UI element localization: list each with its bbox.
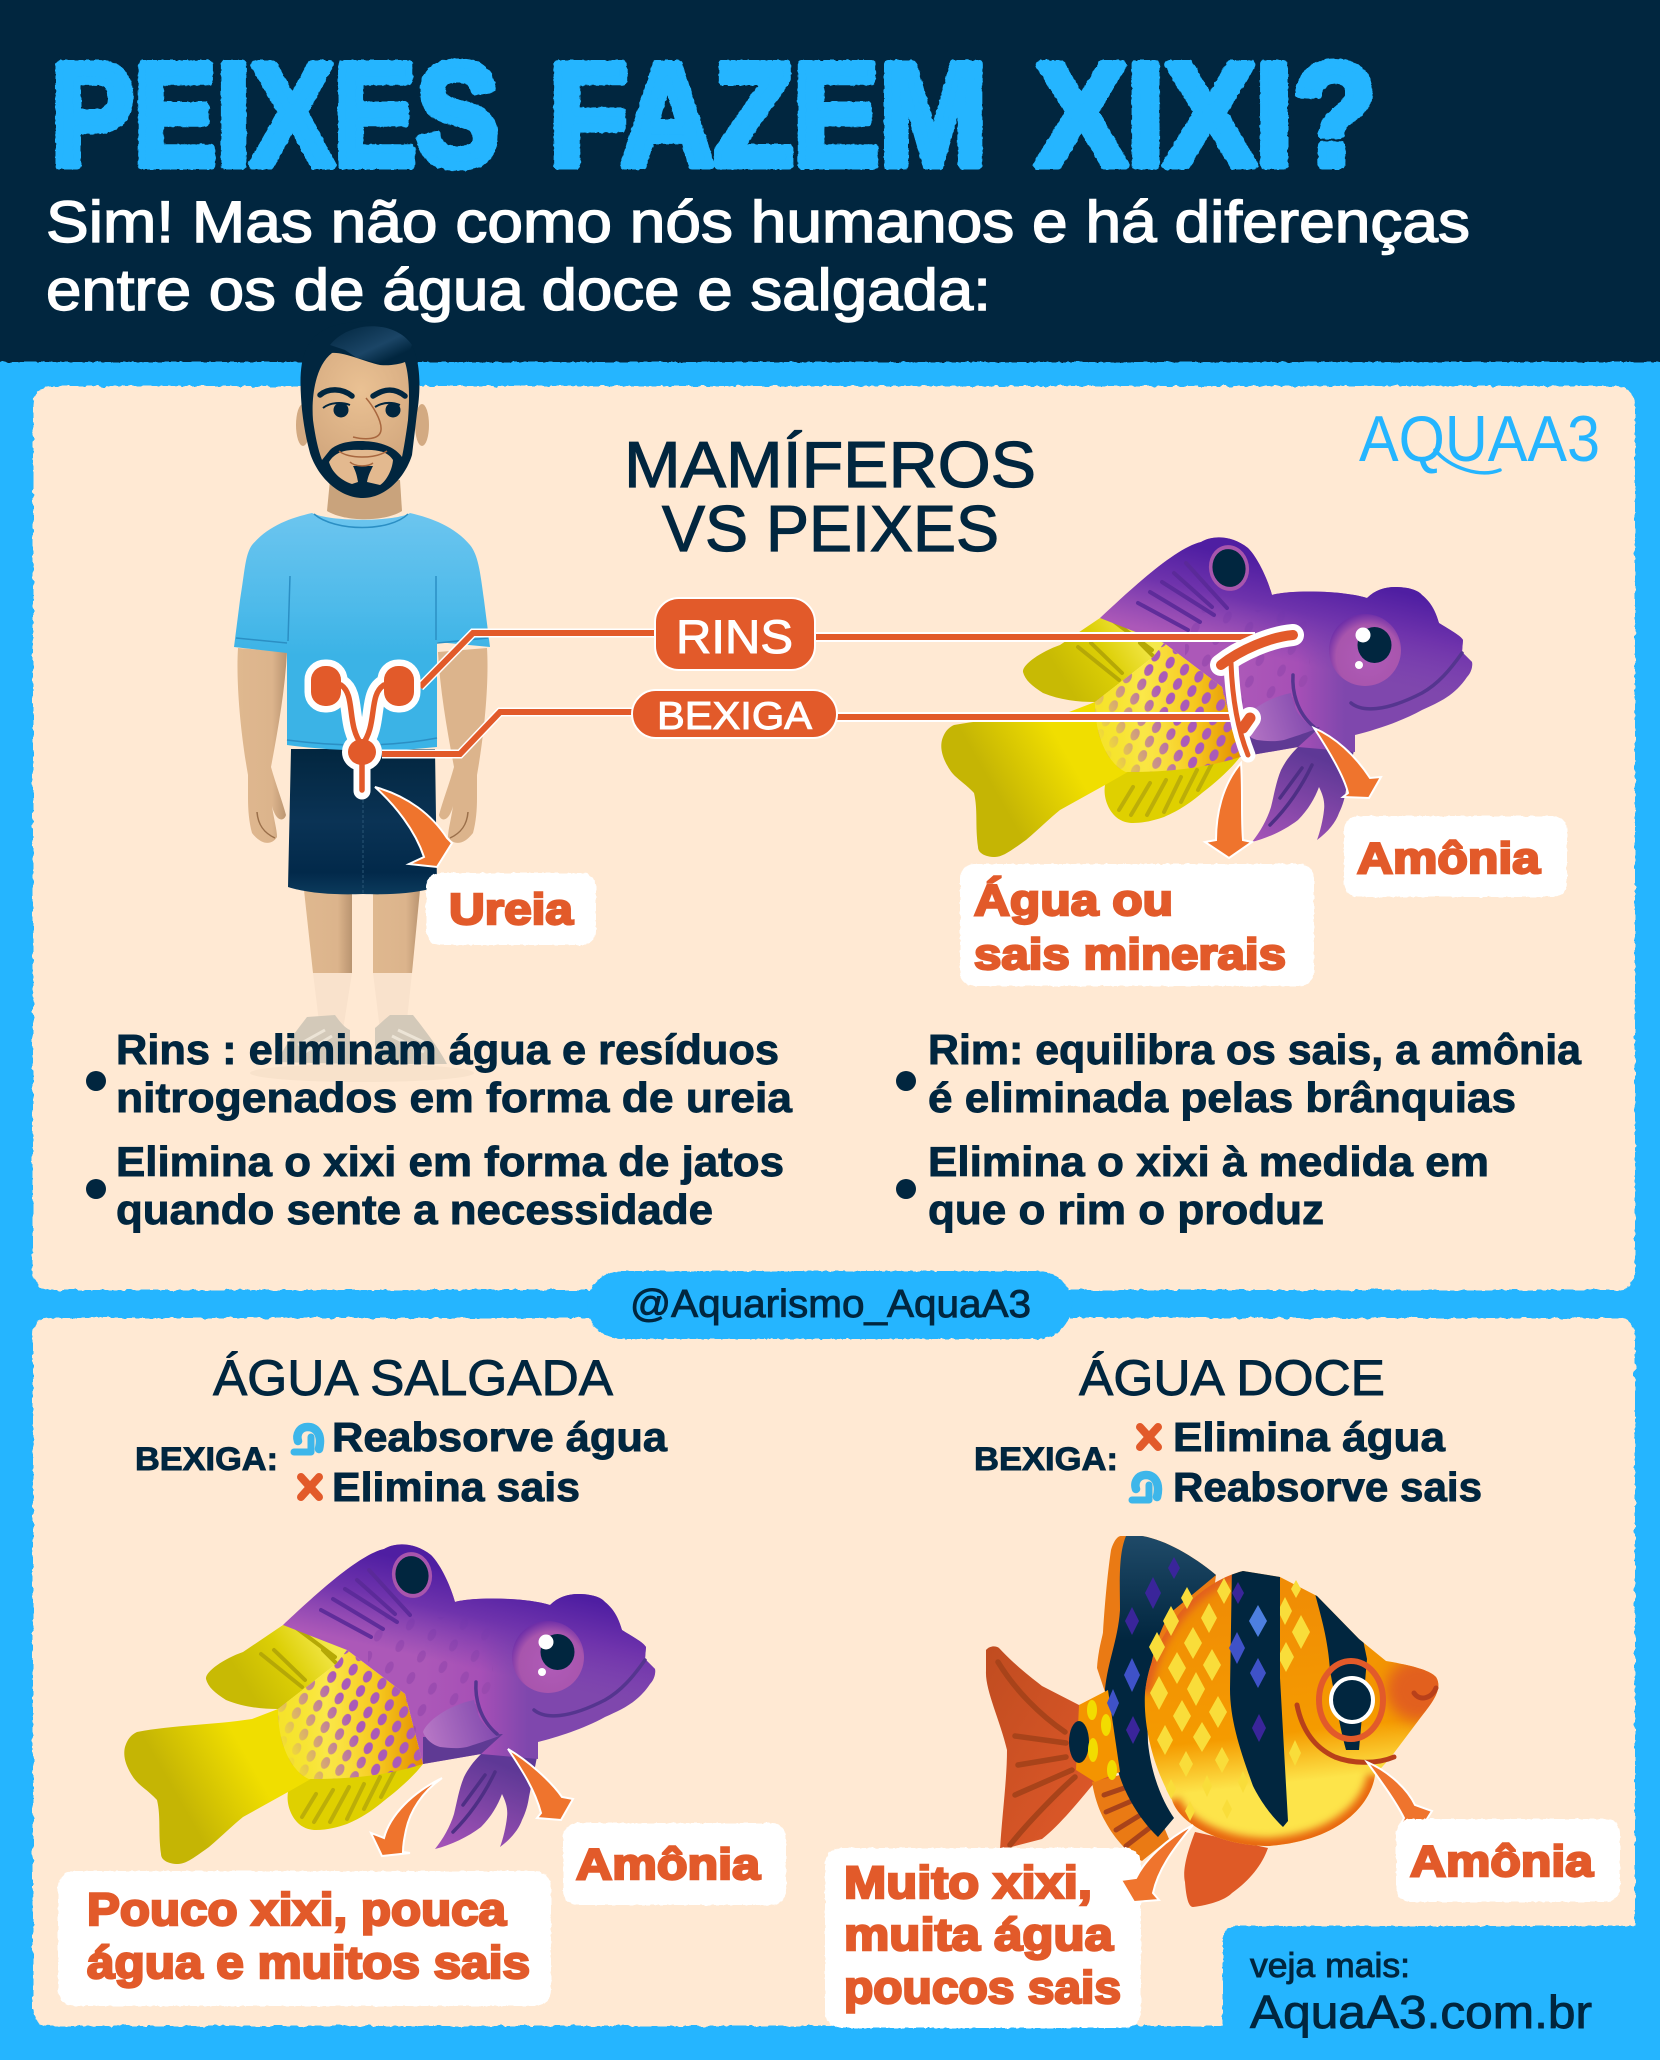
label: much urine: poucos sais — [844, 1962, 1121, 2013]
icon: eliminate — [1140, 1427, 1158, 1447]
label: ammonia: Amônia — [1357, 834, 1541, 883]
panel: mammals vs fish — [33, 386, 1635, 1290]
subtitle: Sim! Mas não como nós humanos e há diferenças — [46, 190, 1470, 255]
mouth — [339, 451, 387, 466]
illustration: man — [234, 322, 490, 1082]
label: ammonia fresh water — [1396, 1819, 1620, 1902]
arrow: fish water or salts — [1205, 763, 1252, 858]
organs: fish kidney and bladder — [1221, 635, 1293, 755]
text block: mammals: Elimina o xixi em forma de jatos — [116, 1138, 784, 1185]
bladder list: salt water: Elimina sais — [332, 1464, 580, 1510]
label: water or mineral salts: sais minerais — [974, 930, 1286, 979]
nose — [353, 398, 381, 439]
arrow: little urine — [371, 1778, 442, 1856]
social handle pill — [587, 1271, 1072, 1339]
subtitle — [46, 190, 1470, 323]
label: bladder: BEXIGA — [657, 695, 812, 738]
logo: AQUAA3 — [1359, 402, 1600, 475]
label: kidneys — [655, 598, 815, 670]
anal fin — [1092, 1770, 1169, 1861]
shorts — [288, 749, 437, 894]
stripes — [1230, 1565, 1367, 1827]
heading: mammals vs fish: MAMÍFEROS — [624, 428, 1036, 501]
bullet — [86, 1179, 106, 1199]
arrow: fish ammonia — [1314, 728, 1381, 798]
peduncle — [1076, 1690, 1120, 1782]
text block: mammals: nitrogenados em forma de ureia — [116, 1074, 793, 1121]
arrow: ammonia salt water — [508, 1749, 573, 1820]
fin and stripe spots — [1107, 1605, 1267, 1717]
head and beard — [301, 322, 419, 498]
connector: kidneys line to fish — [420, 633, 1255, 687]
label: ammonia salt water: Amônia — [576, 1840, 761, 1889]
organs: human kidneys and bladder — [311, 666, 414, 791]
legs — [304, 890, 420, 1030]
ears — [296, 404, 429, 446]
label: ammonia salt water — [563, 1823, 786, 1905]
text block: mammals: quando sente a necessidade — [116, 1186, 713, 1233]
arrow: urea — [375, 787, 452, 867]
face — [313, 353, 409, 460]
pelvic fin — [1184, 1832, 1268, 1907]
nostril — [1414, 1688, 1436, 1698]
shoes — [277, 1015, 447, 1064]
title: XIXI? — [1036, 33, 1376, 196]
body edge shading — [1145, 1571, 1454, 1846]
heading: fresh water: ÁGUA DOCE — [1079, 1350, 1385, 1406]
neck — [327, 480, 402, 519]
bladder list: salt water: BEXIGA: — [135, 1441, 278, 1477]
label: ammonia fresh water: Amônia — [1410, 1837, 1594, 1886]
text block: mammals: Rins : eliminam água e resíduos — [116, 1026, 779, 1073]
website box: veja mais: — [1250, 1947, 1410, 1985]
title: FAZEM — [549, 33, 987, 196]
title: PEIXES — [51, 33, 499, 196]
heading: mammals vs fish — [624, 428, 1036, 565]
connector: bladder line to fish — [382, 712, 1232, 754]
eye — [1319, 1661, 1383, 1739]
bullet — [896, 1071, 916, 1091]
website box — [1223, 1926, 1660, 2060]
label: water or mineral salts — [960, 864, 1314, 986]
header band — [0, 0, 1660, 362]
label: much urine: Muito xixi, — [844, 1857, 1092, 1908]
label: water or mineral salts: Água ou — [974, 875, 1173, 925]
eyes — [334, 402, 400, 418]
hair highlight — [330, 326, 412, 365]
icon: reabsorb — [294, 1427, 320, 1452]
bladder list: salt water — [135, 1414, 668, 1510]
label: kidneys: RINS — [676, 610, 793, 663]
arrow: ammonia fresh water — [1367, 1762, 1432, 1830]
text block: fish: Elimina o xixi à medida em — [928, 1138, 1489, 1185]
fish: orange striped — [986, 1536, 1454, 1907]
label: ammonia — [1344, 816, 1567, 897]
text block: fish — [896, 1026, 1582, 1233]
label: little urine: Pouco xixi, pouca — [87, 1884, 507, 1935]
tail — [986, 1646, 1110, 1850]
shirt — [234, 513, 490, 751]
fish: purple and yellow (top) — [941, 537, 1472, 857]
arms — [237, 648, 488, 843]
bladder list: fresh water: Elimina água — [1173, 1414, 1446, 1460]
text block: fish: é eliminada pelas brânquias — [928, 1074, 1516, 1121]
label: bladder — [632, 690, 837, 738]
body — [1145, 1571, 1438, 1846]
bullet — [896, 1179, 916, 1199]
title — [51, 33, 1376, 196]
bullet — [86, 1071, 106, 1091]
dorsal fin — [1097, 1536, 1216, 1700]
mouth — [1297, 1705, 1394, 1762]
social handle pill: @Aquarismo_AquaA3 — [630, 1283, 1031, 1326]
chin — [329, 450, 393, 485]
label: much urine: muita água — [844, 1909, 1114, 1960]
label: urea: Ureia — [449, 885, 574, 934]
text block: fish: Rim: equilibra os sais, a amônia — [928, 1026, 1582, 1073]
label: little urine: água e muitos sais — [87, 1937, 530, 1988]
icon: eliminate — [301, 1477, 319, 1497]
eyebrows — [320, 390, 405, 396]
text block: fish: que o rim o produz — [928, 1186, 1324, 1233]
bladder list: fresh water — [974, 1414, 1482, 1510]
bladder list: salt water: Reabsorve água — [332, 1414, 668, 1460]
icon: reabsorb — [1132, 1475, 1158, 1500]
ground shadow — [250, 1064, 474, 1082]
heading: salt water: ÁGUA SALGADA — [213, 1350, 614, 1406]
website box: AquaA3.com.br — [1250, 1986, 1592, 2038]
bladder list: fresh water: Reabsorve sais — [1173, 1464, 1482, 1510]
label: little urine — [58, 1871, 551, 2006]
bladder list: fresh water: BEXIGA: — [974, 1441, 1118, 1477]
subtitle: entre os de água doce e salgada: — [46, 258, 991, 323]
text block: mammals — [86, 1026, 793, 1233]
fish: purple and yellow (bottom) — [124, 1544, 655, 1864]
heading: mammals vs fish: VS PEIXES — [662, 492, 999, 565]
arrow: much urine — [1121, 1825, 1193, 1902]
body scales — [1149, 1578, 1310, 1821]
panel: fresh and salt water — [33, 1318, 1635, 2026]
label: much urine — [825, 1848, 1141, 2028]
label: urea — [426, 873, 596, 945]
